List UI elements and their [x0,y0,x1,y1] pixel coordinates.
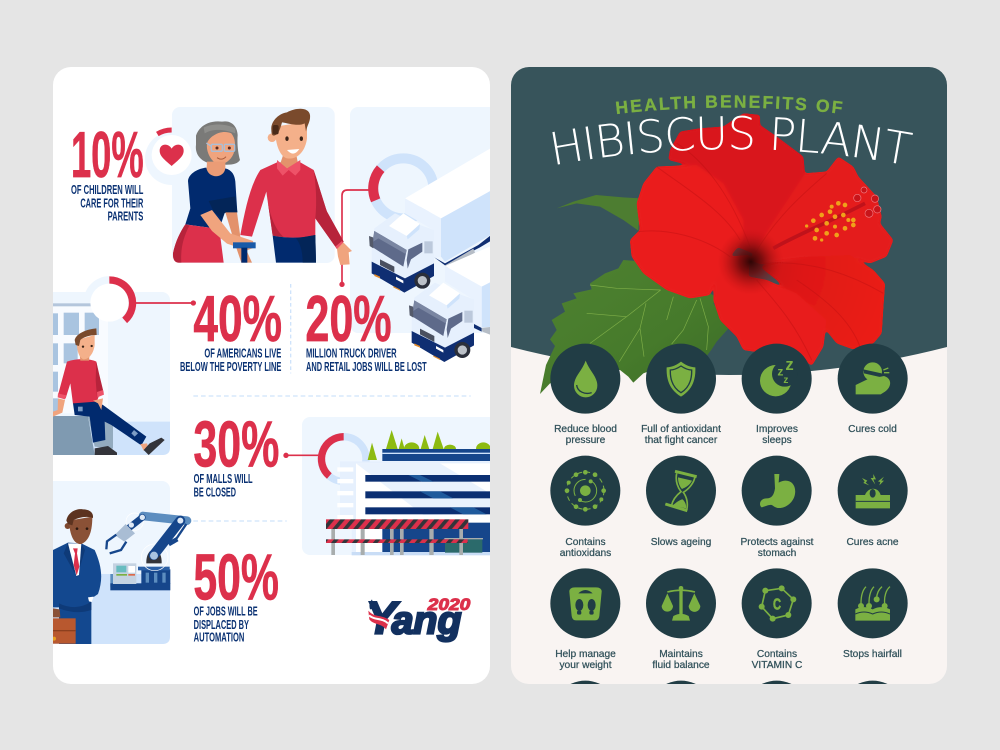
benefit captions: sleeps [762,435,792,446]
text: children will care for parents [71,185,144,220]
benefit captions: Protects against [740,537,814,548]
icon: heart ring [145,130,198,185]
illustration: hibiscus flower [630,113,893,366]
benefit captions: Slows ageing [651,537,712,548]
icon: vitamin C [759,585,796,622]
rooftop trees [368,430,491,460]
robot arm [106,513,187,571]
text: malls closed [194,471,253,499]
benefit captions: Cures cold [848,424,897,435]
icon: hourglass [665,471,697,511]
icon: shield [667,362,695,397]
building [53,303,109,413]
benefit captions: pressure [566,435,606,446]
benefit captions: fluid balance [652,660,710,671]
benefit captions: stomach [758,548,796,559]
man [240,109,352,265]
truck two cargo [445,245,493,336]
title: HIBISCUS PLANT [552,116,913,164]
icon: cold [856,362,890,394]
flower petals [630,113,893,366]
illustration: businessman and robot arm [50,509,187,644]
upper section of left card [71,118,433,374]
benefit captions: Help manage [555,649,616,660]
icon: moon and zzz: z [783,375,788,386]
benefit captions: Stops hairfall [843,649,902,660]
stat: 10 percent: 10% [71,118,144,191]
icon: stomach [760,474,795,508]
left steps [337,467,353,519]
connector: 30 percent to mall ring [283,453,318,458]
text: americans below the poverty line: OF AMERICANS LIVE [204,346,282,361]
businessman [50,509,101,644]
benefit captions: Reduce blood [554,424,617,435]
text: jobs displaced: OF JOBS WILL BE [194,604,258,619]
text: jobs displaced: AUTOMATION [194,630,244,645]
ring: mall percentage [321,437,366,481]
figure [53,328,165,455]
divider: horizontal lower [193,519,287,523]
panel: robot background [53,481,170,574]
leaf: upper [557,195,641,231]
icon: moon and zzz: z [777,365,783,379]
barrier stripes [326,519,468,529]
stat: 20 percent: 20% [305,282,392,355]
illustration panels [53,107,490,574]
benefit captions: antioxidans [560,548,611,559]
panel: mall background [302,417,490,555]
text: truck driver and retail jobs: AND RETAIL JOBS WILL BE LOST [306,359,427,374]
connector: poverty ring to 40 percent [136,300,196,306]
benefit captions: VITAMIN C [752,660,802,671]
illustration: trucks [369,147,493,362]
divider between stats [290,284,292,374]
benefit captions: Full of antioxidant [641,424,721,435]
text: malls closed: BE CLOSED [194,484,236,499]
text: children will care for parents: CARE FOR THEIR [80,195,144,210]
icon: blood drop [574,361,597,397]
illustration: sad man sitting [50,303,170,455]
text: jobs displaced: DISPLACED BY [194,617,249,632]
bench [88,416,113,449]
icon: balance scale [662,586,700,621]
text: truck driver and retail jobs: MILLION TRUCK DRIVER [306,346,397,361]
illustration: elderly woman and son [173,109,352,265]
benefit captions [554,424,902,671]
text: americans below the poverty line [180,348,282,371]
window stripes [365,475,492,514]
benefit captions: Contains [565,537,606,548]
barrier posts [331,528,463,555]
text: americans below the poverty line: BELOW THE POVERTY LINE [180,359,282,374]
panel: truck background [350,107,490,333]
divider: horizontal top [193,395,471,397]
logo: Yang 2020: Yang [366,592,461,643]
benefit captions: Maintains [659,649,703,660]
icon: weight scale [569,587,602,620]
logo: Yang 2020: 2020 [427,595,471,614]
truck two cab [409,283,474,362]
benefit captions: your weight [559,660,612,671]
text: jobs displaced [194,604,258,645]
ground floor [382,523,492,553]
stat: 30 percent: 30% [193,408,279,481]
text: children will care for parents: OF CHILDREN WILL [71,182,143,197]
benefit captions: that fight cancer [645,435,718,446]
truck one cargo [405,147,493,268]
text: children will care for parents: PARENTS [108,208,144,223]
benefit circles [550,344,908,750]
connector: truck ring to 20 percent [339,190,369,287]
benefit captions: Improves [756,424,798,435]
right card: Hibiscus health benefits [511,67,947,684]
robot base [110,550,170,590]
icon: antioxidant atom [565,470,606,512]
benefit captions: Contains [757,649,797,660]
text: malls closed: OF MALLS WILL [194,471,253,486]
icon: moon and zzz [760,355,797,396]
icon: moon and zzz: z [785,355,794,374]
left card: Yang 2020 automation statistics [40,67,512,684]
lower section of left card [193,396,493,645]
icon: vitamin C: C [773,597,781,614]
icon: acne [856,474,890,508]
text: truck driver and retail jobs [306,348,427,371]
stamen [773,187,881,248]
truck one cab [369,213,434,293]
subtitle: HEALTH BENEFITS OF [616,95,843,114]
dark dome header [511,67,947,375]
ring: 40 percent [83,276,133,322]
ring: truck percentage [373,158,433,218]
benefit grid [550,344,908,750]
illustration: closed mall [321,430,493,555]
rooftop [382,449,492,461]
stat: 50 percent: 50% [193,540,279,613]
leaf: large [540,260,730,394]
woman [173,121,256,263]
petal veins and throat [638,143,883,360]
stat: 40 percent: 40% [193,282,282,355]
panel: sad man background [53,292,170,422]
panel: couple background [172,107,335,263]
icon: hair follicles [855,587,890,621]
benefit captions: Cures acne [846,537,899,548]
building body [340,462,370,485]
